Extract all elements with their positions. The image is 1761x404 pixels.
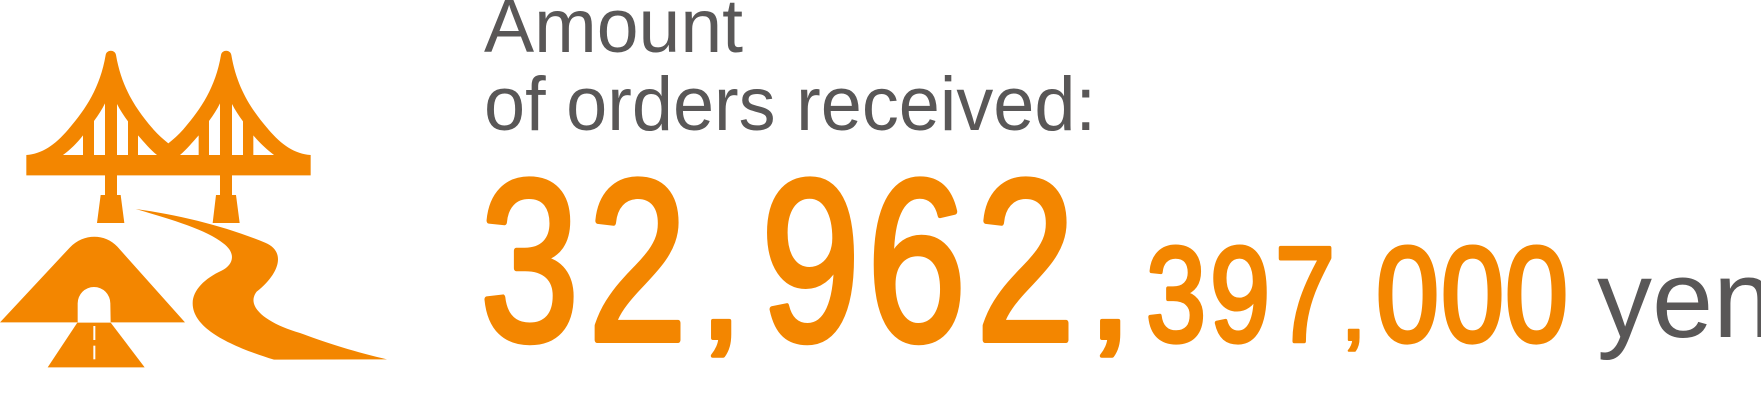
icon: bridge, tunnel and river xyxy=(0,51,387,367)
smaller digits 397,000: 0 xyxy=(1376,220,1439,370)
smaller digits 397,000 xyxy=(1146,218,1568,370)
large digits 32,962: 2 xyxy=(976,132,1075,389)
icon: river xyxy=(136,209,387,360)
smaller digits 397,000: 0 xyxy=(1505,220,1568,370)
large digits 32,962: 9 xyxy=(761,132,860,389)
smaller digits 397,000: 0 xyxy=(1441,220,1504,370)
large digits 32,962 xyxy=(480,132,1126,389)
smaller digits 397,000: 9 xyxy=(1210,218,1270,370)
heading line 2: of orders received: xyxy=(484,62,1096,147)
large digits 32,962: 6 xyxy=(867,132,966,389)
icon: tunnel xyxy=(0,237,185,322)
icon: road xyxy=(48,323,145,367)
large digits 32,962: , xyxy=(705,235,737,363)
smaller digits 397,000: 3 xyxy=(1146,218,1206,370)
large digits 32,962: 3 xyxy=(480,132,579,389)
heading: amount of orders received xyxy=(484,0,1096,147)
smaller digits 397,000: , xyxy=(1344,278,1363,355)
large digits 32,962: 2 xyxy=(588,132,687,389)
value: 32,962,397,000 yen xyxy=(480,132,1761,389)
large digits 32,962: , xyxy=(1094,235,1126,363)
icon: suspension bridge xyxy=(26,51,311,223)
smaller digits 397,000: 7 xyxy=(1275,218,1335,370)
